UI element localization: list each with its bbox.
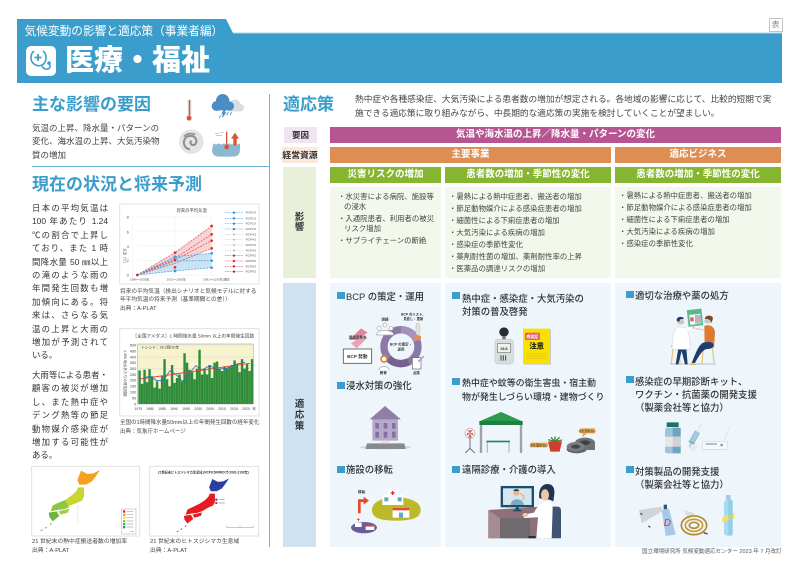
illustration: BCP cycle: BCP の策定・ xyxy=(390,341,412,346)
chart: heavy rain frequency: 1995 xyxy=(182,407,190,411)
text: paragraph one: 増加が予測されて xyxy=(32,337,108,347)
text: main factors xyxy=(32,123,160,160)
bar: patients and seasonality main: 患者数の増加・季節性の変化 xyxy=(466,169,590,180)
illustration: fan, shade tent, standing water xyxy=(465,412,596,453)
chart: projected mean temperature: 将来の平均気温 xyxy=(176,207,207,214)
chart: heavy rain frequency xyxy=(120,329,259,416)
illustration: BCP cycle xyxy=(343,312,426,375)
panel: impact adaptation business xyxy=(615,187,781,278)
chart: heavy rain frequency: 50 xyxy=(132,396,136,400)
panel: adaptation main business xyxy=(445,283,611,547)
chart: projected mean temperature: RCP4.5 xyxy=(246,248,256,252)
illustration: insect spray, coil, sports drink: D xyxy=(664,518,671,529)
chart: projected mean temperature: 4 xyxy=(127,244,130,249)
row label: impact xyxy=(283,167,316,278)
illustration: WBGT meter and notice poster: 26.8 xyxy=(500,347,508,351)
chart: projected mean temperature: RCP8.5 xyxy=(246,259,256,263)
caption: chart rainfall xyxy=(120,419,260,435)
caption: heatstroke map: 出典：A-PLAT xyxy=(32,548,69,554)
text: paragraph one xyxy=(32,203,108,360)
text: main factors: 気温の上昇、降水量・パターンの xyxy=(32,123,159,133)
heading: treatment: 適切な治療や薬の処方 xyxy=(635,290,729,300)
panel: impact main business: ・細菌性による下痢症患者の増加 xyxy=(449,216,560,225)
panel: impact adaptation business: ・細菌性による下痢症患者の増加 xyxy=(619,215,730,224)
page side tag: 表 xyxy=(772,20,780,28)
chart: heavy rain frequency: 200 xyxy=(130,379,136,383)
chart: projected mean temperature: RCP2.6 xyxy=(246,227,256,231)
text: paragraph two: デング熱等の節足 xyxy=(32,410,108,420)
panel: impact adaptation business: ・感染症の季節性変化 xyxy=(619,239,693,248)
panel: impact adaptation business: ・大気汚染による疾病の増加 xyxy=(619,227,715,236)
text: paragraph two: 大雨等による患者・ xyxy=(32,370,108,380)
chart: heavy rain frequency: 2010 xyxy=(218,407,226,411)
heading: product development xyxy=(635,466,729,490)
divider left xyxy=(32,166,270,167)
chart: heavy rain frequency: 150 xyxy=(130,385,136,389)
caption: mosquito map: 出典：A-PLAT xyxy=(150,548,187,554)
illustration: remote consultation xyxy=(488,484,561,538)
panel: impact disaster: の浸水 xyxy=(344,202,366,210)
chart: heavy rain frequency: 400 xyxy=(130,355,136,359)
text: paragraph one: 間降水量 50 ㎜以上 xyxy=(32,257,108,267)
bar: patients and seasonality main xyxy=(445,167,611,183)
chart: projected mean temperature: 2031〜2050年 xyxy=(167,276,186,281)
heading: environment: 熱中症や蚊等の衛生害虫・宿主動 xyxy=(462,378,596,388)
bar: main business: 主要事業 xyxy=(451,149,490,160)
text: paragraph one: 年間発生回数も増 xyxy=(32,283,108,293)
text: adaptation intro: 施できる適応策に取り組みながら、中長期的な適応策の実施を検討していくことが望ましい。 xyxy=(355,108,719,118)
heading: diagnostics: ワクチン・抗菌薬の開発支援 xyxy=(635,389,757,400)
illustration: fan, shade tent, standing water: 水を溜めない xyxy=(578,428,596,433)
map: tiger mosquito habitat: 21世紀末ヒトスジシマカ生息域 (RCP8.5/MIROC5 2081-2100年) xyxy=(158,469,249,474)
text: paragraph two: 増加する可能性が xyxy=(32,437,108,447)
heading: telemedicine: 遠隔診療・介護の導入 xyxy=(462,464,556,475)
row label: adaptation: 策 xyxy=(295,420,304,432)
row label: adaptation: 応 xyxy=(295,410,304,420)
caption: chart temperature: 将来の平均気温（排出シナリオと気候モデルに対する xyxy=(120,288,256,294)
heading: product development: 対策製品の開発支援 xyxy=(635,466,719,477)
text: paragraph two xyxy=(32,370,108,460)
panel: impact adaptation business: ・節足動物媒介による感染症患者の増加 xyxy=(619,203,752,212)
bar: factor: 気温や海水温の上昇／降水量・パターンの変化 xyxy=(456,129,655,140)
chart: projected mean temperature: 2081〜2100年 期間 xyxy=(203,276,229,281)
text: paragraph two: ある。 xyxy=(32,450,57,460)
illustration: medicine, syringe, test kit xyxy=(665,422,730,453)
panel: impact disaster: ・入通院患者、利用者の被災 xyxy=(338,214,434,222)
text: paragraph two: し、また熱中症や xyxy=(32,397,108,407)
chart: heavy rain frequency: 350 xyxy=(130,361,136,365)
chart: projected mean temperature: RCP2.6 xyxy=(246,222,256,226)
text: paragraph one: 温の上昇と大雨の xyxy=(32,324,108,334)
bar: patients and seasonality business: 患者数の増加・季節性の変化 xyxy=(636,169,760,180)
heading: awareness: 対策の普及啓発 xyxy=(462,306,528,317)
heading: diagnostics xyxy=(635,376,757,413)
illustration: facility relocation xyxy=(351,489,421,533)
caption: chart temperature xyxy=(120,288,256,312)
chart: heavy rain frequency: ［全国アメダス］1 時間降水量 50mm 以上の年間発生回数 xyxy=(133,333,254,340)
chart: heavy rain frequency: 450 xyxy=(130,349,136,353)
chart: projected mean temperature: RCP8.5 xyxy=(246,270,256,274)
icon: thermometer xyxy=(186,99,192,121)
panel: impact main business: ・大気汚染による疾病の増加 xyxy=(449,228,545,237)
chart: heavy rain frequency: 300 xyxy=(130,367,136,371)
chart: projected mean temperature: 2 xyxy=(127,258,130,263)
text: paragraph one: 加傾向にある。将 xyxy=(32,297,108,307)
bar: disaster risk: 災害リスクの増加 xyxy=(347,169,424,180)
chart: heavy rain frequency: 2020 xyxy=(242,407,250,411)
illustration: WBGT meter and notice poster: 感染症 xyxy=(526,333,538,339)
panel: impact main business: ・暑熱による熱中症患者、搬送者の増加 xyxy=(449,192,582,201)
text: paragraph one: 日本の平均気温は xyxy=(32,203,108,213)
row label: adaptation xyxy=(283,283,316,547)
chart: heavy rain frequency: 1980 xyxy=(146,407,154,411)
heading: awareness: 熱中症・感染症・大気汚染の xyxy=(462,292,584,304)
heading: diagnostics: （製薬会社等と協力） xyxy=(635,402,729,413)
panel: impact main business: ・医薬品の調達リスクの増加 xyxy=(449,264,545,272)
caption: chart rainfall: 全国の1時間降水量50mm以上の年間発生回数の経年変化 xyxy=(120,420,259,426)
chart: projected mean temperature: 気温（℃） xyxy=(122,248,127,265)
heading: diagnostics: 感染症の早期診断キット、 xyxy=(635,376,747,387)
caption: mosquito map: 21 世紀末のヒトスジシマカ生息域 xyxy=(150,539,239,545)
caption: heatstroke map xyxy=(32,538,127,554)
icon: typhoon swirl xyxy=(179,129,204,154)
chart: projected mean temperature: RCP4.5 xyxy=(246,232,256,236)
caption: chart temperature: 出典：A-PLAT xyxy=(120,306,157,312)
panel: impact main business: ・節足動物媒介による感染症患者の増加 xyxy=(449,204,582,213)
illustration: fan, shade tent, standing water: 水を溜めない xyxy=(530,442,548,447)
text: adaptation intro xyxy=(355,94,771,118)
bar: main business xyxy=(330,147,611,163)
illustration: BCP cycle: 緊急度発令 xyxy=(349,335,367,340)
chart: projected mean temperature: 6 xyxy=(127,229,130,234)
illustration: BCP cycle: 見直し・更新 xyxy=(403,316,424,321)
panel: impact main business: ・薬剤耐性菌の増加、薬剤耐性率の上昇 xyxy=(449,252,582,261)
panel: impact main business xyxy=(445,187,611,278)
chart: projected mean temperature: 8 xyxy=(127,215,130,220)
illustration: WBGT meter and notice poster: 注意 xyxy=(529,342,545,351)
panel: adaptation disaster xyxy=(330,283,441,547)
illustration: BCP cycle: BCP のリスト、 xyxy=(401,312,426,317)
footer credit: 国立環境研究所 気候変動適応センター 2023 年 7 月改訂 xyxy=(642,549,782,555)
chart: heavy rain frequency: 250 xyxy=(130,373,136,377)
heading: facility relocation: 施設の移転 xyxy=(346,464,393,475)
caption: heatstroke map: 21 世紀末の熱中症搬送者数の増加率 xyxy=(32,539,127,545)
chart: projected mean temperature: RCP4.5 xyxy=(246,243,256,247)
text: main factors: 変化、海水温の上昇、大気汚染物 xyxy=(32,136,160,146)
text: paragraph one: ℃の割合で上昇し xyxy=(32,230,108,240)
illustration: BCP cycle: 教育 xyxy=(380,370,387,375)
chart: projected mean temperature: 1986〜2005年 xyxy=(130,276,149,281)
chart: heavy rain frequency: 1,300 地点あたりの発生回数 xyxy=(123,350,128,397)
map: heatstroke transport increase xyxy=(32,466,140,536)
chart: heavy rain frequency: 1975 xyxy=(134,407,142,411)
icon: rain cloud xyxy=(212,94,244,118)
chart: heavy rain frequency: 年 xyxy=(252,406,256,411)
row label: management resources xyxy=(282,147,318,163)
bar: adaptation business xyxy=(615,147,781,163)
panel: impact main business: ・感染症の季節性変化 xyxy=(449,240,523,249)
heading: environment: 物が発生しづらい環境・建物づくり xyxy=(462,392,604,402)
text: paragraph one: の滝のような雨の xyxy=(32,270,108,280)
icon: stethoscope xyxy=(26,46,56,76)
heading: current state and projection: 現在の状況と将来予測 xyxy=(32,175,202,194)
panel: impact disaster xyxy=(330,187,441,278)
caption: chart temperature: 年平均気温の将来予測（基準期間との差）） xyxy=(120,296,231,302)
illustration: BCP cycle: 訓練 xyxy=(381,317,389,322)
text: paragraph two: 動物媒介感染症が xyxy=(32,424,108,434)
bar: patients and seasonality business xyxy=(615,167,781,183)
chart: heavy rain frequency: 1985 xyxy=(158,407,166,411)
row label: impact: 響 xyxy=(295,222,304,232)
chart: heavy rain frequency: 500 xyxy=(130,343,136,347)
panel: impact disaster: ・水災害による病院、施設等 xyxy=(338,192,434,201)
illustration: BCP cycle: 運用 xyxy=(397,346,405,351)
text: paragraph one: ており、また 1 時 xyxy=(32,243,108,253)
bar: disaster risk xyxy=(330,167,441,183)
chart: projected mean temperature: RCP2.6 xyxy=(246,216,256,220)
banner subtitle: 気候変動の影響と適応策（事業者編） xyxy=(24,24,223,38)
chart: heavy rain frequency: 1990 xyxy=(170,407,178,411)
panel: adaptation business xyxy=(615,283,781,547)
row label: factor xyxy=(284,127,317,143)
divider vertical xyxy=(269,94,270,547)
panel: impact disaster: ・サプライチェーンの断絶 xyxy=(338,236,426,244)
chart: projected mean temperature: RCP8.5 xyxy=(246,254,256,258)
heading: awareness xyxy=(462,292,584,317)
chart: heavy rain frequency: 100 xyxy=(130,391,136,395)
heading: adaptation: 適応策 xyxy=(283,95,334,114)
page side tag xyxy=(768,18,782,32)
icon: sea temperature rise xyxy=(212,132,240,157)
chart: projected mean temperature: RCP4.5 xyxy=(246,238,256,242)
row label: management resources: 経営資源 xyxy=(282,150,318,160)
illustration: doctor and patient xyxy=(670,309,716,364)
caption: chart rainfall: 出典：気象庁ホームページ xyxy=(120,429,186,435)
banner shape xyxy=(17,19,782,83)
row label: impact: 影 xyxy=(295,212,304,222)
chart: heavy rain frequency: 2015 xyxy=(230,407,238,411)
chart: heavy rain frequency: 2005 xyxy=(206,407,214,411)
row label: adaptation: 適 xyxy=(295,398,304,410)
main title: 医療・福祉 xyxy=(65,45,210,77)
heading: main factors: 主な影響の要因 xyxy=(32,95,151,114)
heading: BCP: BCP の策定・運用 xyxy=(346,290,424,302)
chart: projected mean temperature: RCP8.5 xyxy=(246,264,256,268)
bar: adaptation business: 適応ビジネス xyxy=(669,149,726,160)
text: paragraph one: 100 年あたり 1.24 xyxy=(32,216,108,226)
text: paragraph one: いる。 xyxy=(32,350,57,360)
panel: impact disaster: リスク増加 xyxy=(344,224,381,233)
text: paragraph one: 来は、さらなる気 xyxy=(32,310,108,320)
illustration: facility relocation: 移転 xyxy=(358,489,366,494)
text: paragraph two: 顧客の被災が増加 xyxy=(32,383,108,393)
map: tiger mosquito habitat xyxy=(150,466,259,536)
chart: heavy rain frequency: トレンド：29.2回/10年 xyxy=(141,344,179,349)
illustration: flood-proof building xyxy=(360,406,411,449)
caption: mosquito map xyxy=(150,538,239,554)
heading: environment xyxy=(462,378,604,402)
row label: factor: 要因 xyxy=(292,130,309,140)
illustration: WBGT meter and notice poster xyxy=(495,327,551,365)
text: main factors: 質の増加 xyxy=(32,150,66,160)
chart: heavy rain frequency: 0 xyxy=(134,402,136,406)
header banner xyxy=(17,19,782,83)
text: adaptation intro: 熱中症や各種感染症、大気汚染による患者数の増加が想定される。各地域の影響に応じて、比較的短期で実 xyxy=(355,94,771,104)
bar: factor xyxy=(330,127,781,143)
chart: projected mean temperature: RCP2.6 xyxy=(246,211,256,215)
illustration: BCP cycle: BCP 発動 xyxy=(347,353,368,360)
chart: projected mean temperature: 0 xyxy=(127,273,130,278)
chart: heavy rain frequency: 2000 xyxy=(194,407,202,411)
illustration: BCP cycle: 点検 xyxy=(413,370,420,375)
panel: impact adaptation business: ・暑熱による熱中症患者、搬送者の増加 xyxy=(619,191,752,200)
chart: projected mean temperature xyxy=(120,204,259,284)
heading: product development: （製薬会社等と協力） xyxy=(635,479,729,490)
illustration: insect spray, coil, sports drink xyxy=(639,495,734,536)
heading: flood measures: 浸水対策の強化 xyxy=(346,380,412,391)
